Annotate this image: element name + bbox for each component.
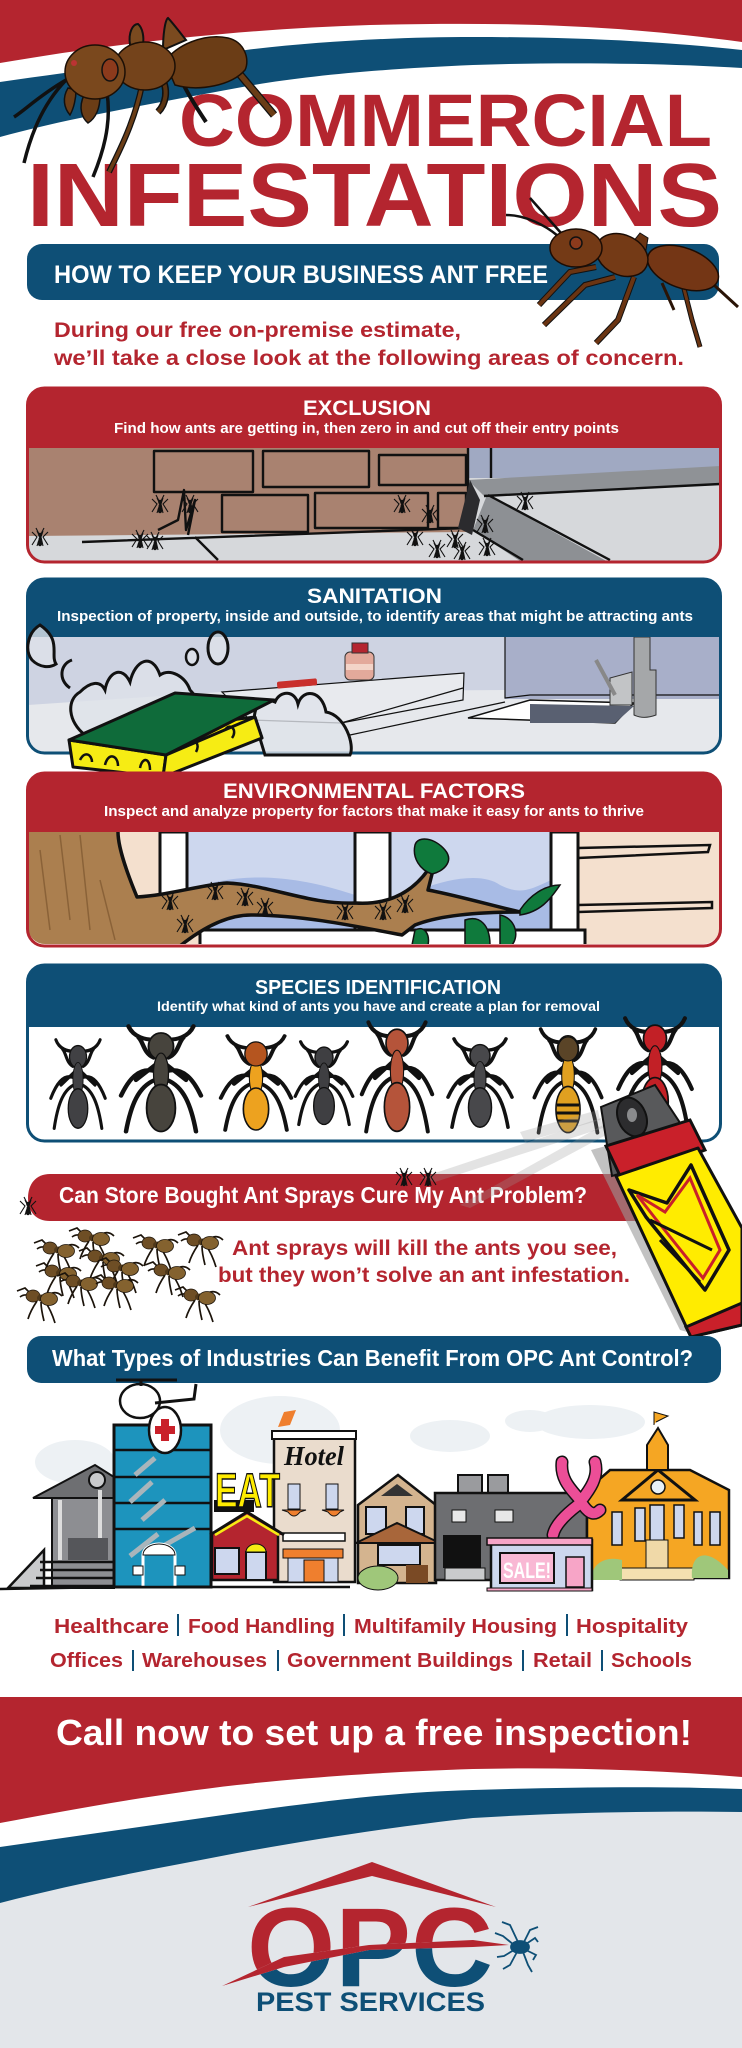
ant spray text: Ant sprays will kill the ants you see,: [232, 1237, 617, 1260]
industries pill: [27, 1336, 721, 1383]
heading and description: Find how ants are getting in, then zero in and cut off their entry points: [114, 421, 619, 437]
header wave: red, white and blue bands: [0, 0, 742, 137]
icon: spray can: [591, 1085, 742, 1337]
OPC wordmark: OPC: [247, 1885, 493, 2010]
panel: species identification: [28, 965, 720, 1141]
industries list: [50, 1614, 692, 1672]
spray mist: [420, 1110, 606, 1208]
subtitle pill: [27, 244, 719, 300]
subtitle pill: HOW TO KEEP YOUR BUSINESS ANT FREE: [54, 261, 548, 289]
heading and description: [157, 977, 600, 1014]
OPC wordmark: [252, 1908, 490, 1987]
title: INFESTATIONS: [27, 146, 722, 246]
house: [356, 1475, 440, 1590]
ant spray text: [218, 1237, 630, 1287]
scene: kitchen counter: [28, 637, 720, 753]
heading and description: SANITATION: [307, 585, 442, 608]
title: [27, 79, 722, 246]
heading and description: Inspection of property, inside and outside, to identify areas that might be attracting ants: [57, 609, 693, 625]
icon: soap bubbles: [28, 625, 351, 755]
bank building: [8, 1465, 114, 1588]
sale shop: SALE!: [503, 1558, 551, 1583]
intro text: During our free on-premise estimate,: [54, 319, 461, 342]
heading and description: [104, 780, 644, 820]
tagline: PEST SERVICES: [256, 1987, 485, 2017]
call to action: Call now to set up a free inspection!: [56, 1712, 692, 1753]
header band: [28, 774, 720, 832]
panel: sanitation: [28, 579, 720, 753]
heading and description: ENVIRONMENTAL FACTORS: [223, 780, 525, 803]
heading and description: EXCLUSION: [303, 397, 431, 420]
industries list: Schools: [611, 1650, 692, 1672]
industries pill: What Types of Industries Can Benefit From OPC Ant Control?: [52, 1345, 693, 1371]
spray question pill: [28, 1174, 640, 1221]
logo: OPC Pest Services: [222, 1862, 538, 2017]
intro text: [53, 319, 684, 370]
icon: sponge: [69, 693, 274, 777]
roof: [248, 1862, 496, 1907]
hospital with helicopter: [114, 1380, 211, 1587]
header band: [28, 966, 720, 1027]
header band: [28, 580, 720, 637]
industries list: Warehouses: [142, 1650, 267, 1672]
heading and description: [114, 397, 619, 437]
panel: exclusion: [28, 388, 720, 563]
restaurant with EAT sign: EAT: [215, 1465, 280, 1518]
header band: [28, 389, 720, 448]
panel: environmental factors: [28, 773, 720, 950]
title: COMMERCIAL: [179, 79, 712, 162]
icon: spider: [495, 1922, 538, 1972]
heading and description: Inspect and analyze property for factors that make it easy for ants to thrive: [104, 804, 644, 820]
heading and description: [57, 585, 693, 625]
industries list: Offices: [50, 1650, 123, 1672]
scene: brick wall with ants: [28, 448, 720, 563]
swoosh: [222, 1940, 509, 1986]
icon: swarm of brown ants: [17, 1228, 223, 1323]
sale shop: [487, 1538, 592, 1591]
hotel: Hotel: [283, 1441, 344, 1471]
heading and description: Identify what kind of ants you have and create a plan for removal: [157, 998, 600, 1014]
spray question pill: Can Store Bought Ant Sprays Cure My Ant Problem?: [59, 1182, 587, 1208]
footer: waves and call to action: [0, 1697, 742, 2048]
icon: large ant right: [506, 198, 738, 347]
industries list: Multifamily Housing: [354, 1616, 557, 1638]
industries list: Healthcare: [54, 1616, 169, 1638]
OPC wordmark: OPC: [247, 1885, 493, 2010]
industries list: Hospitality: [576, 1616, 689, 1638]
school: [587, 1412, 729, 1585]
ant spray text: but they won’t solve an ant infestation.: [218, 1264, 630, 1287]
intro text: we’ll take a close look at the following areas of concern.: [53, 347, 684, 370]
heading and description: SPECIES IDENTIFICATION: [255, 977, 501, 999]
industries list: Food Handling: [188, 1616, 335, 1638]
icon: large ant top left: [14, 18, 274, 177]
restaurant with EAT sign: [210, 1465, 284, 1580]
industries list: Government Buildings: [287, 1650, 513, 1672]
pink inflatable: [553, 1462, 600, 1535]
scene: tree branch touching window: [28, 832, 720, 950]
warehouse: [435, 1475, 587, 1580]
illustration: town skyline: [0, 1380, 729, 1591]
clouds: [35, 1396, 645, 1484]
ant species row: [51, 1018, 692, 1133]
hotel: [272, 1410, 356, 1582]
icon: ants on pill: [20, 1168, 436, 1215]
industries list: Retail: [533, 1650, 592, 1672]
